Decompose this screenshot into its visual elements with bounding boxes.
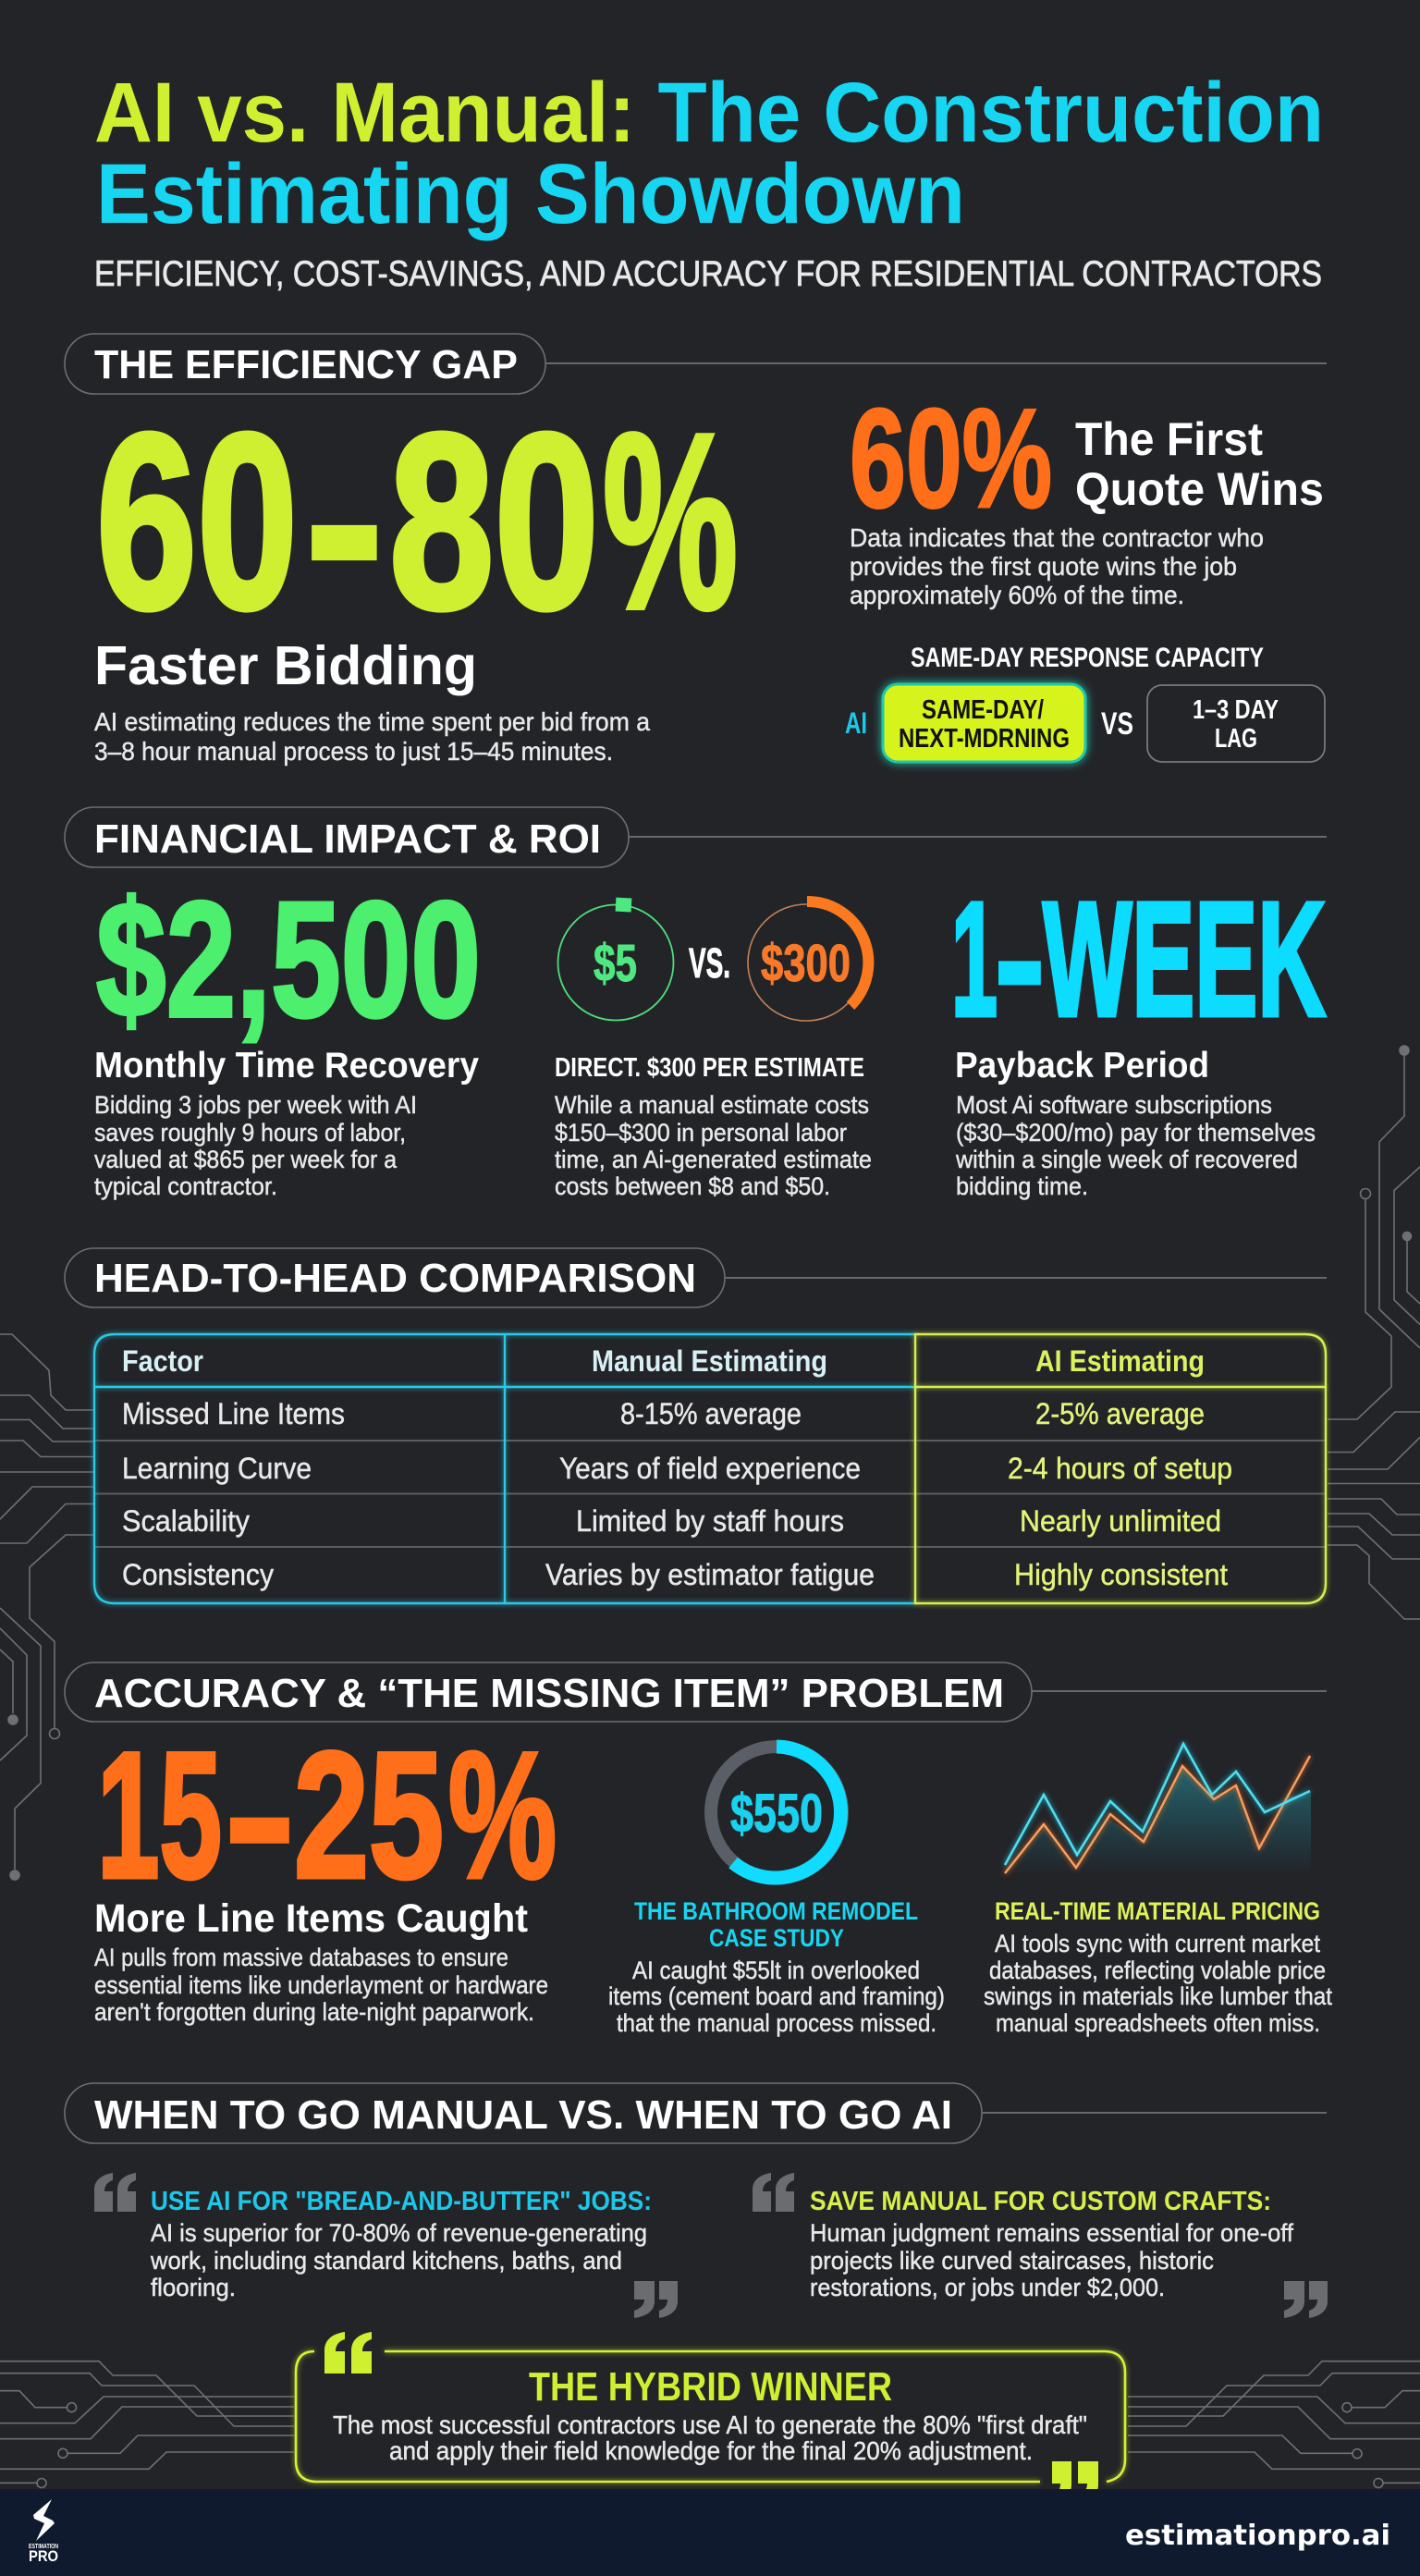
table column: AI estimating: Nearly unlimited [1020, 1504, 1221, 1538]
VS.: VS. [689, 939, 730, 987]
panel: use AI for bread-and-butter jobs [94, 2173, 678, 2318]
heading: The First [1075, 413, 1263, 465]
panel: monthly time recovery [94, 867, 481, 1200]
description: Human judgment remains essential for one-off [810, 2219, 1293, 2247]
stat 15-25%: - [225, 1715, 295, 1916]
description: AI estimating reduces the time spent per bid from a [94, 707, 650, 736]
description: essential items like underlayment or hardware [94, 1971, 548, 1999]
description: The most successful contractors use AI to generate the 80% "first draft" [333, 2410, 1087, 2439]
description: projects like curved staircases, historic [810, 2247, 1214, 2275]
description: approximately 60% of the time. [850, 581, 1184, 609]
footer [0, 2489, 1420, 2576]
manual box: LAG [1215, 724, 1257, 754]
description: AI tools sync with current market [995, 1930, 1320, 1957]
description: AI is superior for 70-80% of revenue-generating [151, 2219, 647, 2247]
table column: manual estimating: Varies by estimator fatigue [545, 1558, 875, 1591]
section heading: the efficiency gap [65, 334, 1327, 394]
table column: factor: Consistency [122, 1558, 274, 1591]
table column: AI estimating [1008, 1344, 1232, 1591]
description: manual spreadsheets often miss. [996, 2009, 1320, 2037]
description: Most Ai software subscriptions [956, 1091, 1272, 1119]
description: 3–8 hour manual process to just 15–45 minutes. [94, 737, 613, 766]
panel: same-day response capacity: SAME-DAY RESPONSE CAPACITY [911, 643, 1264, 673]
section heading: accuracy [65, 1662, 1327, 1722]
subheading: Monthly Time Recovery [94, 1046, 479, 1086]
section heading: accuracy: ACCURACY & “THE MISSING ITEM” PROBLEM [94, 1671, 1004, 1716]
table column: factor: Factor [122, 1344, 203, 1378]
panel: payback period [951, 869, 1326, 1200]
table column: AI estimating: AI Estimating [1035, 1344, 1205, 1378]
panel: faster bidding [94, 383, 738, 766]
subheading: DIRECT. $300 PER ESTIMATE [555, 1053, 864, 1083]
icon: opening quote [324, 2332, 372, 2374]
description: valued at $865 per week for a [94, 1146, 398, 1173]
icon: opening quote [94, 2173, 136, 2212]
section heading: financial impact: FINANCIAL IMPACT & ROI [94, 816, 601, 862]
title: AI vs. Manual: The Construction [94, 66, 1324, 160]
heading [634, 1897, 918, 1952]
heading [1075, 413, 1324, 515]
table column: AI estimating: 2-4 hours of setup [1008, 1452, 1232, 1485]
description [94, 707, 650, 766]
description: costs between $8 and $50. [555, 1172, 830, 1200]
manual box: 1–3 DAY [1193, 695, 1279, 725]
title: Estimating Showdown [96, 147, 965, 241]
AI label: AI [845, 706, 867, 740]
table column: factor: Scalability [122, 1504, 250, 1538]
description: AI caught $55lt in overlooked [632, 1957, 920, 1984]
heading: USE AI FOR "BREAD-AND-BUTTER" JOBS: [151, 2187, 652, 2216]
stat 15-25%: 15 [97, 1715, 222, 1916]
description: and apply their field knowledge for the final 20% adjustment. [389, 2436, 1033, 2465]
subheading: More Line Items Caught [94, 1896, 528, 1941]
website: estimationpro.ai [1125, 2520, 1390, 2552]
description [94, 1091, 417, 1200]
heading: Quote Wins [1075, 463, 1324, 515]
table column: AI estimating: Highly consistent [1014, 1558, 1228, 1591]
description: flooring. [151, 2274, 236, 2301]
VS: VS [1101, 706, 1133, 742]
AI box: SAME-DAY/ [922, 695, 1044, 725]
stat 15-25%: % [448, 1715, 557, 1916]
description [333, 2410, 1087, 2465]
panel: real-time material pricing [984, 1744, 1332, 2037]
description: that the manual process missed. [617, 2009, 936, 2037]
table column: manual estimating: Years of field experience [559, 1452, 861, 1485]
big stat 60-80%: - [305, 383, 384, 661]
description: databases, reflecting volable price [989, 1957, 1326, 1984]
panel: cost comparison [555, 898, 872, 1200]
stat $2,500: $2,500 [96, 867, 481, 1051]
stat 1-WEEK: 1 [951, 869, 998, 1050]
table column: factor: Missed Line Items [122, 1397, 345, 1430]
AI box [883, 684, 1085, 762]
subheading: Payback Period [955, 1046, 1209, 1086]
description: aren't forgotten during late-night paparwork. [94, 1998, 534, 2026]
section heading: head-to-head: HEAD-TO-HEAD COMPARISON [94, 1256, 696, 1301]
description: work, including standard kitchens, baths, and [150, 2247, 622, 2275]
heading: SAVE MANUAL FOR CUSTOM CRAFTS: [810, 2187, 1271, 2216]
description: within a single week of recovered [955, 1146, 1298, 1173]
logo: PRO [29, 2547, 58, 2565]
icon: closing quote [1284, 2281, 1328, 2318]
subheading: Faster Bidding [94, 635, 477, 696]
description: Bidding 3 jobs per week with AI [94, 1091, 417, 1119]
description [955, 1091, 1316, 1200]
section heading: head-to-head [65, 1248, 1327, 1307]
description [850, 523, 1264, 609]
description [810, 2219, 1293, 2301]
table column: manual estimating: Manual Estimating [592, 1344, 827, 1378]
icon: $5 gauge: $5 [594, 934, 637, 993]
heading: THE BATHROOM REMODEL [634, 1897, 918, 1925]
table column: manual estimating: Limited by staff hours [576, 1504, 844, 1538]
background circuit traces [0, 1046, 1420, 2487]
panel: first quote wins [850, 380, 1324, 609]
icon: opening quote [753, 2173, 794, 2212]
table column: factor [122, 1344, 345, 1591]
description: Data indicates that the contractor who [850, 523, 1264, 552]
section heading: when to go manual [65, 2083, 1327, 2143]
table column: manual estimating [545, 1344, 875, 1591]
big stat 60-80%: 80 [389, 383, 599, 661]
heading: CASE STUDY [709, 1924, 844, 1952]
description: restorations, or jobs under $2,000. [810, 2274, 1165, 2301]
comparison table [94, 1334, 1326, 1603]
title [94, 66, 1324, 241]
icon: $300 gauge: $300 [761, 934, 851, 993]
big stat 60-80% [96, 383, 738, 661]
panel: bathroom remodel case study [608, 1747, 945, 2037]
description [94, 1944, 548, 2026]
description [608, 1957, 945, 2037]
description: $150–$300 in personal labor [555, 1119, 847, 1147]
description: AI pulls from massive databases to ensure [94, 1944, 508, 1971]
description: While a manual estimate costs [555, 1091, 869, 1119]
heading: THE HYBRID WINNER [529, 2364, 892, 2410]
section heading: the efficiency gap: THE EFFICIENCY GAP [94, 342, 518, 387]
description [555, 1091, 872, 1200]
stat 1-WEEK: - [995, 869, 1045, 1050]
description [984, 1930, 1332, 2037]
table column: factor: Learning Curve [122, 1452, 312, 1485]
line chart [1005, 1744, 1311, 1875]
icon: $550 ring: $550 [730, 1784, 823, 1844]
callout: the hybrid winner [296, 2332, 1125, 2503]
stat 15-25% [97, 1715, 557, 1916]
logo [29, 2499, 58, 2565]
description: time, an Ai-generated estimate [555, 1146, 872, 1173]
panel: same-day response capacity [845, 643, 1325, 762]
description [150, 2219, 647, 2301]
description: saves roughly 9 hours of labor, [94, 1119, 406, 1147]
big stat 60-80%: % [603, 383, 738, 661]
table column: manual estimating: 8-15% average [620, 1397, 802, 1430]
icon: $300 gauge [748, 902, 868, 1021]
panel: more line items caught [94, 1715, 557, 2026]
icon: closing quote [1052, 2461, 1098, 2503]
description: items (cement board and framing) [608, 1982, 945, 2010]
heading: REAL-TIME MATERIAL PRICING [995, 1897, 1320, 1925]
big stat 60-80%: 60 [96, 383, 298, 661]
section heading: financial impact [65, 807, 1327, 867]
description: swings in materials like lumber that [984, 1982, 1332, 2010]
manual box [1147, 685, 1325, 762]
stat 1-WEEK [951, 869, 1326, 1050]
section heading: when to go manual: WHEN TO GO MANUAL VS. WHEN TO GO AI [94, 2092, 952, 2138]
panel: save manual for custom crafts [753, 2173, 1328, 2318]
description: provides the first quote wins the job [850, 552, 1237, 581]
icon: closing quote [634, 2281, 678, 2318]
icon: $5 gauge [558, 898, 673, 1021]
description: ($30–$200/mo) pay for themselves [956, 1119, 1316, 1147]
icon: $550 ring [711, 1747, 842, 1878]
description: bidding time. [956, 1172, 1088, 1200]
AI box: NEXT-MDRNING [899, 724, 1070, 754]
stat 15-25%: 25 [294, 1715, 444, 1916]
stat 60%: 60% [850, 380, 1052, 537]
logo: ESTIMATION [29, 2542, 58, 2550]
description: typical contractor. [94, 1172, 277, 1200]
table column: AI estimating: 2-5% average [1035, 1397, 1205, 1430]
